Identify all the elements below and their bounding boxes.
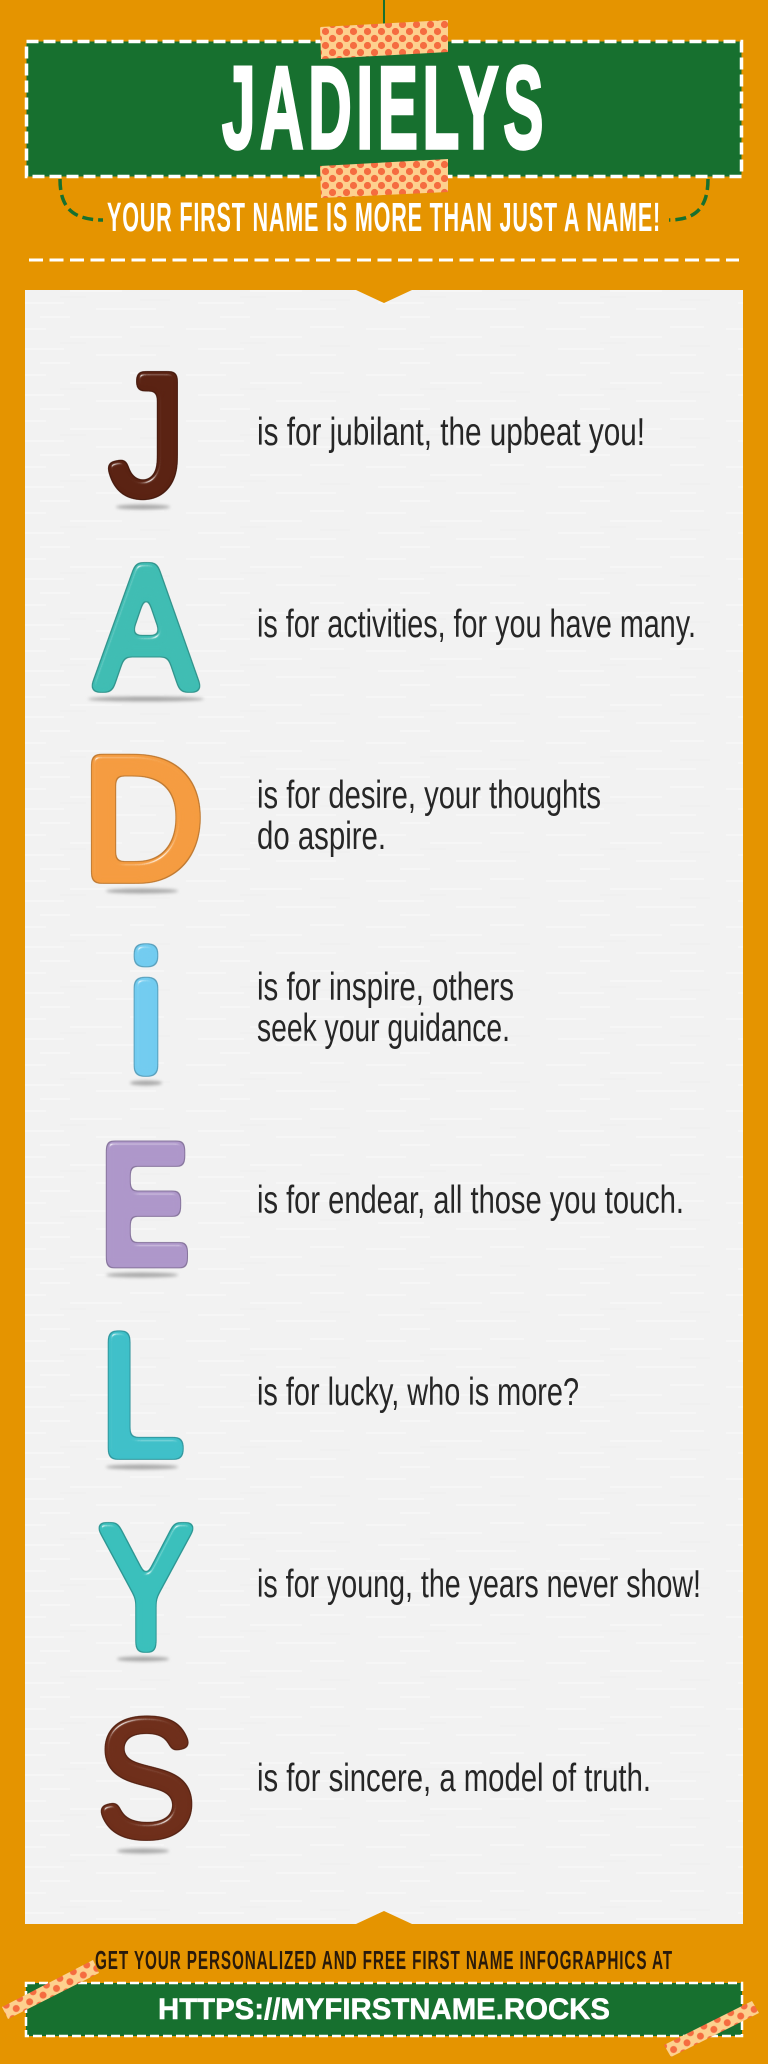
icon: letter D: D (82, 721, 204, 917)
bottom tape (320, 159, 448, 198)
icon: letter i: i (127, 918, 165, 1109)
top notch (356, 290, 412, 303)
row A (88, 530, 696, 726)
text: I: seek your guidance. (257, 1007, 510, 1050)
footer green panel (26, 1983, 742, 2036)
row I (127, 918, 514, 1109)
right dashed connector (669, 179, 708, 220)
footer (2, 1945, 759, 2057)
row J (108, 337, 645, 533)
text: S: is for sincere, a model of truth. (257, 1757, 651, 1800)
row D (82, 721, 601, 917)
text: D: do aspire. (257, 815, 386, 858)
text: I: is for inspire, others (257, 966, 514, 1009)
text: L: is for lucky, who is more? (257, 1371, 579, 1414)
text: I (257, 966, 514, 1050)
footer URL: HTTPS://MYFIRSTNAME.ROCKS (158, 1993, 610, 2026)
panel: letters (25, 290, 743, 1924)
icon: letter A: A (94, 530, 198, 726)
bottom notch (356, 1911, 412, 1924)
row S (96, 1684, 651, 1872)
text: J: is for jubilant, the upbeat you! (257, 411, 645, 454)
icon: letter S: S (96, 1684, 196, 1872)
icon: letter E: E (99, 1107, 191, 1303)
icon: letter L: L (99, 1298, 185, 1492)
hanging string (383, 0, 385, 26)
top tape (320, 20, 448, 59)
icon: letter Y: Y (98, 1489, 194, 1686)
row L (99, 1298, 579, 1492)
header banner (26, 0, 742, 198)
text: D: is for desire, your thoughts (257, 774, 601, 817)
dashed divider (29, 258, 739, 262)
icon: letter J: J (108, 337, 186, 533)
row Y (98, 1489, 701, 1686)
left dashed connector (60, 179, 103, 220)
row E (99, 1107, 684, 1303)
right footer tape (664, 2001, 759, 2057)
green title panel (26, 42, 742, 176)
text: D (257, 774, 601, 858)
left footer tape (2, 1960, 99, 2019)
